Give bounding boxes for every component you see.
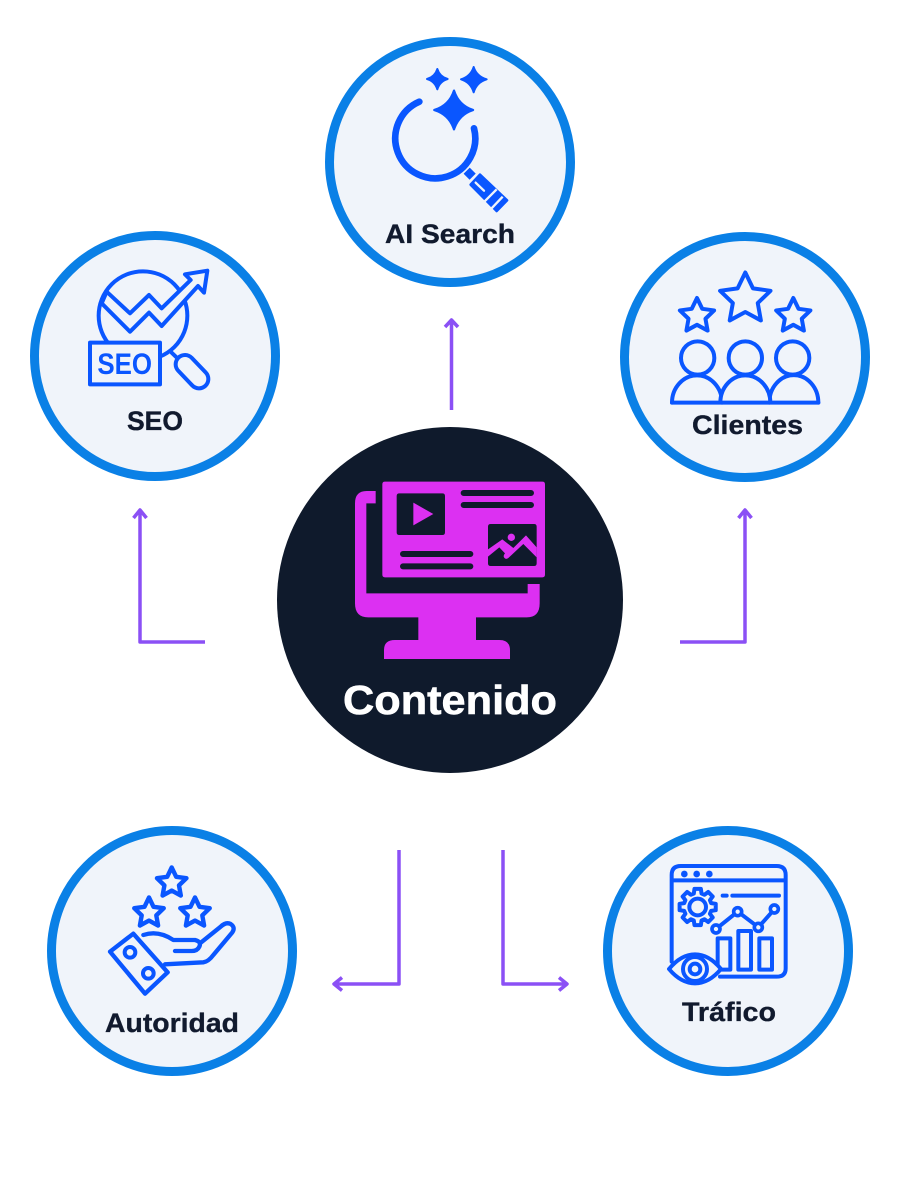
panel: Contenido center [277, 427, 623, 773]
label: Clientes: Clientes [692, 410, 803, 440]
label: AI Search: AI Search [385, 219, 515, 249]
label: Tráfico: Tráfico [682, 997, 776, 1027]
panel: Clientes [624, 236, 866, 478]
icon: AI search magnifier [395, 67, 507, 211]
icon: analytics window with eye [669, 866, 786, 983]
arrow: to Autoridad [334, 850, 399, 990]
label: SEO: SEO [127, 406, 183, 436]
panel: SEO [34, 236, 276, 476]
icon: SEO growth magnifier: SEO [97, 348, 152, 381]
icon: customers and stars [672, 272, 818, 403]
icon: monitor with content [355, 482, 545, 659]
panel: Tráfico [608, 830, 848, 1072]
icon: hand with stars and bill [110, 868, 234, 994]
arrow: to SEO [134, 510, 205, 642]
label: Autoridad: Autoridad [105, 1008, 239, 1038]
panel: AI Search [330, 42, 570, 282]
label: Contenido: Contenido [343, 677, 557, 723]
arrow: to Clientes [680, 510, 752, 642]
icon: SEO growth magnifier [90, 271, 207, 384]
panel: Autoridad [52, 830, 292, 1072]
arrow: to AI Search [445, 320, 458, 410]
arrow: to Tráfico [503, 850, 567, 990]
